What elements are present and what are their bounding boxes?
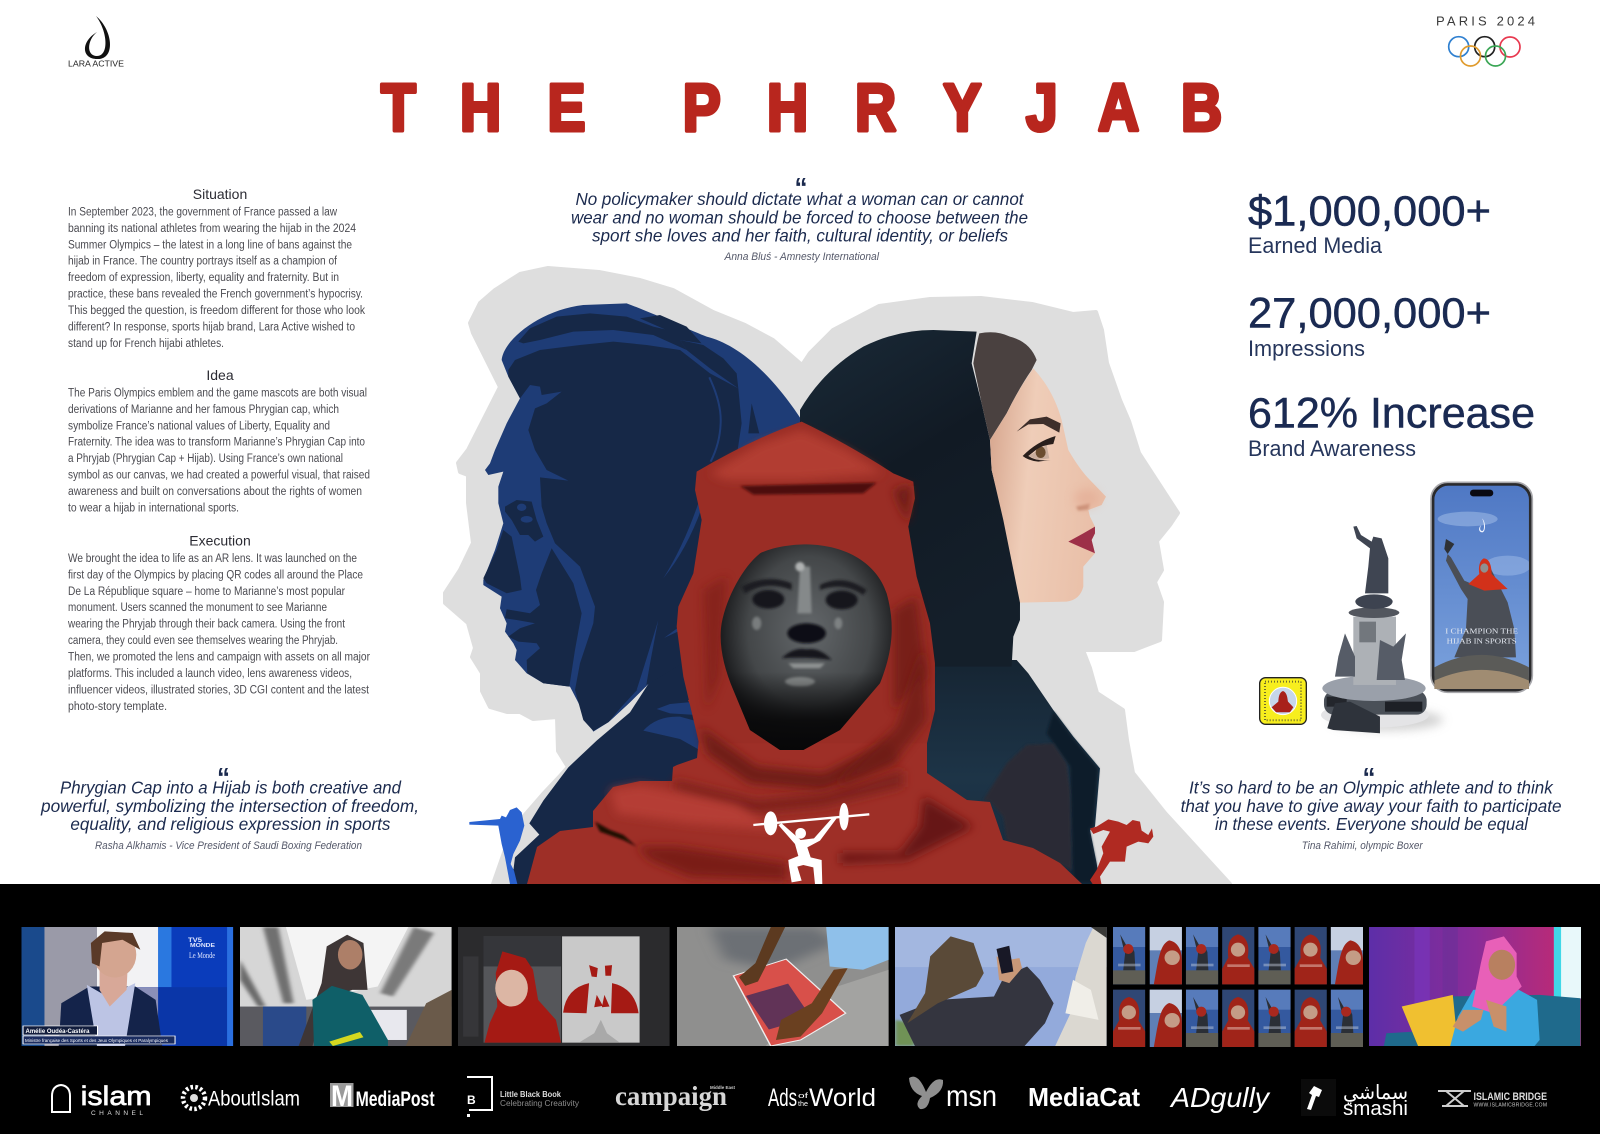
- AR assets group: [1260, 482, 1532, 733]
- logo: MSN: [909, 1077, 997, 1113]
- quote: Rasha Alkhamis: equality, and religious expression in sports: [70, 814, 391, 834]
- main illustration: three profiles: [445, 268, 1230, 885]
- quote: Tina Rahimi: Tina Rahimi, olympic Boxer: [1302, 840, 1424, 852]
- logo: Little Black Book: B: [467, 1093, 476, 1107]
- text block: Idea: symbol as our canvas, we had created a powerful visual, that raised: [68, 470, 370, 482]
- photo grid: AR lens stories: [1113, 927, 1363, 1047]
- chin shadow: [721, 544, 892, 750]
- KPI: earned media: $1,000,000+: [1248, 188, 1491, 236]
- KPI: earned media: Earned Media: [1248, 233, 1383, 258]
- logo: MSN: msn: [946, 1080, 997, 1113]
- icon: white weightlifter silhouette: [753, 803, 869, 884]
- logo: Little Black Book: [467, 1077, 580, 1117]
- text block: Execution: monument. Users scanned the monument to see Marianne: [68, 602, 327, 614]
- quote: Tina Rahimi: [1181, 762, 1562, 852]
- quote: Anna Bluś: sport she loves and her faith, cultural identity, or beliefs: [592, 226, 1008, 246]
- logo: MediaPost: M: [331, 1080, 353, 1113]
- quote: Rasha Alkhamis: Phrygian Cap into a Hijab is both creative and: [60, 778, 402, 798]
- text block: Situation: Situation: [193, 186, 247, 202]
- quote: Rasha Alkhamis: Rasha Alkhamis - Vice President of Saudi Boxing Federation: [95, 840, 362, 852]
- text block: Idea: The Paris Olympics emblem and the game mascots are both visual: [68, 387, 367, 399]
- nostril shadow: [1076, 503, 1090, 511]
- phone mockup: I CHAMPION THE: [1445, 626, 1519, 635]
- woman in black hijab, profile: [800, 330, 1106, 884]
- text block: Situation: [68, 186, 365, 350]
- logo: Smashi: سماشي: [1343, 1080, 1408, 1105]
- quote: Anna Bluś: [571, 172, 1028, 263]
- lips: [1068, 527, 1095, 553]
- KPI: brand awareness: 612% Increase: [1248, 390, 1535, 438]
- logo: Ads of the World: of: [798, 1093, 808, 1100]
- logo: Ads of the World: Ads: [768, 1084, 797, 1112]
- photo: TV interview with minister: TV5: [188, 938, 203, 944]
- monument statue: [1321, 526, 1443, 733]
- mouth: [782, 649, 832, 660]
- text block: Situation: different? In response, sports hijab brand, Lara Active wished to: [68, 322, 355, 334]
- quote: Tina Rahimi: It’s so hard to be an Olympic athlete and to think: [1189, 778, 1554, 798]
- hijab: [800, 330, 1106, 667]
- photo: TV interview with minister: Ministre française des Sports et des Jeux Olympiques et Paralympiques: [25, 1038, 169, 1043]
- logo: AboutIslam: AboutIslam: [208, 1088, 300, 1110]
- text block: Execution: [67, 532, 370, 713]
- logo: Little Black Book: Celebrating Creativity: [500, 1098, 580, 1108]
- KPI: brand awareness: Brand Awareness: [1248, 436, 1416, 461]
- logo: Paris 2024 with Olympic rings: PARIS 2024: [1436, 14, 1535, 28]
- quote: Anna Bluś: Anna Bluś - Amnesty International: [724, 251, 880, 263]
- text block: Idea: symbolize France’s national values of Liberty, Equality and: [68, 420, 330, 432]
- body and dark tunic: [907, 620, 1100, 884]
- black footer band: [0, 884, 1600, 1134]
- logo: Islamic Bridge: ISLAMIC BRIDGE: [1474, 1091, 1547, 1103]
- quote: Anna Bluś: No policymaker should dictate what a woman can or cannot: [576, 189, 1025, 209]
- KPI: impressions: [1248, 290, 1491, 361]
- brows: [742, 579, 792, 593]
- text block: Idea: awareness and built on conversations about the rights of women: [68, 486, 362, 498]
- quote: Rasha Alkhamis: “: [217, 762, 230, 792]
- text block: Execution: Execution: [189, 533, 251, 549]
- logo: Islamic Bridge: [1438, 1091, 1547, 1108]
- logo: Smashi: smashi: [1343, 1098, 1408, 1120]
- logo: Ads of the World: [768, 1084, 876, 1112]
- grey silhouette backdrop: [445, 268, 1230, 884]
- nose: [797, 567, 812, 613]
- logo: Smashi: [1301, 1079, 1408, 1120]
- statue face: [721, 544, 892, 750]
- red Phryjab cloth: [527, 422, 1082, 884]
- text block: Situation: hijab in France. The country portrays itself as a champion of: [68, 256, 338, 268]
- text block: Execution: influencer videos, illustrated stories, 3D CGI content and the latest: [68, 685, 370, 697]
- logo: Lara Active: [68, 16, 124, 68]
- photo: TV interview with minister: Le Monde: [189, 951, 215, 960]
- logo: Ads of the World: the: [798, 1101, 808, 1108]
- icon: red runner silhouette: [1090, 819, 1153, 885]
- logo: AboutIslam: [183, 1087, 300, 1110]
- cheek highlights: [752, 617, 761, 630]
- scarf folds: [595, 727, 903, 880]
- logo: Adgully: ADgully: [1169, 1082, 1271, 1113]
- eyes: [752, 590, 784, 609]
- text block: Situation: Summer Olympics – the latest in a long line of bans against the: [68, 239, 352, 251]
- phone mockup: HIJAB IN SPORTS: [1447, 636, 1517, 645]
- photo: 3D modelling software with hood: [458, 927, 670, 1046]
- text block: Situation: In September 2023, the government of France passed a law: [68, 206, 338, 218]
- text block: Situation: banning its national athletes from wearing the hijab in the 2024: [68, 223, 357, 235]
- quote: Rasha Alkhamis: [40, 762, 419, 852]
- text block: Situation: This begged the question, is freedom different for those who look: [68, 305, 365, 317]
- text block: Situation: practice, these bans revealed the French government’s hypocrisy.: [68, 289, 363, 301]
- snapcode: [1260, 678, 1306, 724]
- text block: Situation: freedom of expression, liberty, equality and fraternity. But in: [68, 272, 339, 284]
- text block: Execution: platforms. This included a launch video, lens awareness videos,: [68, 668, 352, 680]
- logo: MediaCat: MediaCat: [1028, 1082, 1140, 1112]
- quote: Tina Rahimi: “: [1362, 762, 1376, 792]
- photo: TV interview with minister: [22, 927, 233, 1046]
- KPI: impressions: Impressions: [1248, 336, 1365, 361]
- logo: Paris 2024 with Olympic rings: [1436, 14, 1535, 66]
- quote: Anna Bluś: “: [794, 172, 808, 202]
- logo: Islam Channel: CHANNEL: [91, 1110, 143, 1117]
- text block: Execution: first day of the Olympics by placing QR codes all around the Place: [68, 569, 363, 581]
- logo: Islam Channel: islam: [81, 1081, 152, 1111]
- quote: Anna Bluś: wear and no woman should be forced to choose between the: [571, 207, 1028, 227]
- text block: Idea: derivations of Marianne and her famous Phrygian cap, which: [68, 404, 339, 416]
- blue Marianne head: [483, 303, 807, 732]
- eye: [1029, 445, 1049, 460]
- quote: Rasha Alkhamis: powerful, symbolizing the intersection of freedom,: [40, 796, 419, 816]
- icon: blue martial artist silhouette: [469, 807, 524, 884]
- text block: Execution: We brought the idea to life as an AR lens. It was launched on the: [68, 553, 357, 565]
- text block: Idea: [68, 367, 370, 515]
- KPI: impressions: 27,000,000+: [1248, 290, 1491, 338]
- logo: Lara Active: LARA ACTIVE: [68, 58, 124, 68]
- logo: MediaPost: [330, 1080, 435, 1113]
- text block: Execution: photo-story template.: [68, 701, 167, 713]
- text block: Situation: stand up for French hijabi athletes.: [68, 338, 224, 350]
- text block: Idea: Fraternity. The idea was to transform Marianne’s Phrygian Cap into: [68, 437, 365, 449]
- logo: Ads of the World: World: [809, 1084, 876, 1112]
- KPI: earned media: [1248, 188, 1491, 258]
- KPI: brand awareness: [1248, 390, 1535, 461]
- hair: [973, 332, 1037, 440]
- text block: Execution: De La République square – home to Marianne’s most popular: [68, 586, 345, 598]
- photo: hands placing QR poster on pavement: [677, 927, 889, 1046]
- quote: Tina Rahimi: in these events. Everyone should be equal: [1215, 814, 1529, 834]
- face: [990, 368, 1106, 603]
- logo: Islamic Bridge: WWW.ISLAMICBRIDGE.COM: [1474, 1102, 1547, 1108]
- photo: TV interview with minister: MONDE: [190, 943, 215, 949]
- title: THE PHRYJAB: [381, 71, 1222, 146]
- photo: TV studio interview with pink hijab: [1369, 927, 1581, 1046]
- text block: Idea: a Phryjab (Phrygian Cap + Hijab). Using France’s own national: [68, 453, 343, 465]
- text block: Execution: camera, they could even see themselves wearing the Phryjab.: [68, 635, 338, 647]
- quote: Tina Rahimi: that you have to give away your faith to participate: [1181, 796, 1562, 816]
- logo: Campaign: Middle East: [710, 1085, 736, 1090]
- text block: Idea: to wear a hijab in international sports.: [68, 503, 239, 515]
- photo: TV interview with minister: Amélie Oudéa-Castéra: [26, 1028, 90, 1035]
- photo: woman photographing the monument: [895, 927, 1107, 1046]
- text block: Execution: wearing the Phryjab through their back camera. Using the front: [67, 619, 346, 631]
- text block: Idea: Idea: [206, 367, 234, 383]
- logo: MediaPost: MediaPost: [356, 1088, 435, 1111]
- logo: Little Black Book: Little Black Book: [500, 1089, 561, 1099]
- phone mockup: [1431, 482, 1532, 692]
- logo: Campaign: campaign: [615, 1081, 727, 1111]
- text block: Execution: Then, we promoted the lens and campaign with assets on all major: [68, 652, 370, 664]
- eyebrow: [1017, 417, 1061, 433]
- photo: hijabi athlete at station: [240, 927, 452, 1046]
- logo: Islam Channel: [52, 1081, 152, 1117]
- blue shoulders: [512, 634, 747, 884]
